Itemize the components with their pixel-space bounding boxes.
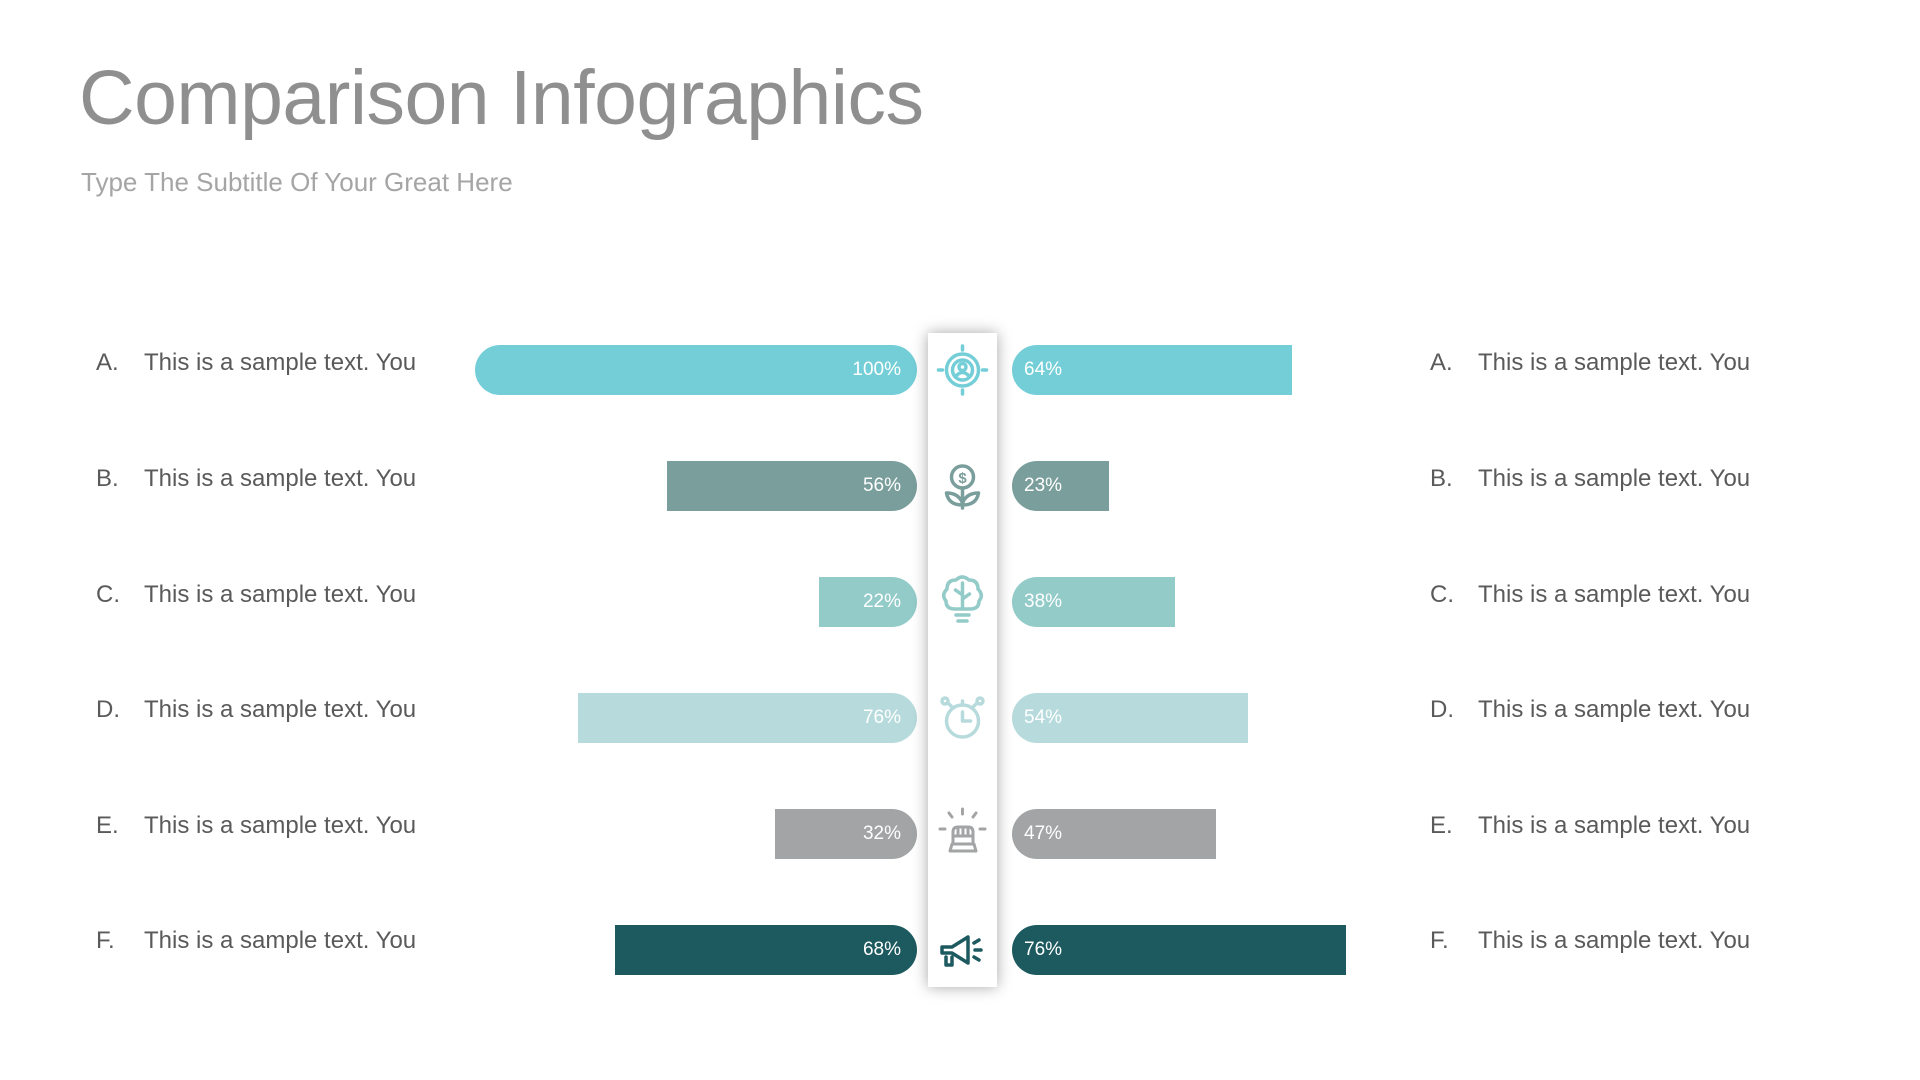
center icon column [928, 333, 997, 987]
right labels: This is a sample text. You [1478, 927, 1750, 954]
label B right: B. [1430, 465, 1453, 492]
icon: megaphone [942, 937, 981, 965]
bar E right 47% [1012, 809, 1216, 859]
bar C right 38%: 38% [1024, 591, 1062, 612]
subtitle: Type The Subtitle Of Your Great Here [81, 167, 513, 197]
label A left [96, 349, 416, 376]
label C left [96, 581, 416, 608]
bar E left 32% [775, 809, 917, 859]
bar D left 76%: 76% [863, 707, 901, 728]
label D left: D. [96, 696, 120, 723]
bar A right 64%: 64% [1024, 359, 1062, 380]
right labels: This is a sample text. You [1478, 812, 1750, 839]
label E left: E. [96, 812, 119, 839]
label D left [96, 696, 416, 723]
label F left [96, 927, 416, 954]
left labels: This is a sample text. You [144, 465, 416, 492]
right labels: This is a sample text. You [1478, 696, 1750, 723]
icon: target person [938, 346, 986, 394]
bar E left 32%: 32% [863, 823, 901, 844]
bar B right 23%: 23% [1024, 475, 1062, 496]
label C right: C. [1430, 581, 1454, 608]
label A right: A. [1430, 349, 1453, 376]
label E right [1430, 812, 1750, 839]
left labels: This is a sample text. You [144, 696, 416, 723]
bar D left 76% [578, 693, 917, 743]
left labels [96, 349, 416, 954]
icon: brain bulb [944, 577, 981, 621]
left labels: This is a sample text. You [144, 812, 416, 839]
label E right: E. [1430, 812, 1453, 839]
bar E right 47%: 47% [1024, 823, 1062, 844]
right labels: This is a sample text. You [1478, 465, 1750, 492]
bar B left 56%: 56% [863, 475, 901, 496]
bar B right 23% [1012, 461, 1109, 511]
bar A right 64% [1012, 345, 1292, 395]
bar C right 38% [1012, 577, 1175, 627]
icon: money plant [946, 466, 978, 508]
left bar chart [475, 345, 917, 975]
label D right: D. [1430, 696, 1454, 723]
right labels [1430, 349, 1750, 954]
icon: money plant: $ [958, 470, 967, 487]
bar F left 68%: 68% [863, 939, 901, 960]
label F right: F. [1430, 927, 1449, 954]
label B right [1430, 465, 1750, 492]
label A right [1430, 349, 1750, 376]
bar F right 76% [1012, 925, 1346, 975]
right labels: This is a sample text. You [1478, 349, 1750, 376]
bar D right 54%: 54% [1024, 707, 1062, 728]
bar D right 54% [1012, 693, 1248, 743]
bar C left 22%: 22% [863, 591, 901, 612]
left labels: This is a sample text. You [144, 349, 416, 376]
icon: fist [940, 809, 985, 851]
label F left: F. [96, 927, 115, 954]
icon: stopwatch [942, 698, 983, 737]
right labels: This is a sample text. You [1478, 581, 1750, 608]
label D right [1430, 696, 1750, 723]
label B left: B. [96, 465, 119, 492]
label C left: C. [96, 581, 120, 608]
bar A left 100%: 100% [852, 359, 901, 380]
label F right [1430, 927, 1750, 954]
label A left: A. [96, 349, 119, 376]
title: Comparison Infographics [79, 55, 924, 141]
bar B left 56% [667, 461, 917, 511]
bar F left 68% [615, 925, 917, 975]
right bar chart [1012, 345, 1346, 975]
label E left [96, 812, 416, 839]
label B left [96, 465, 416, 492]
bar F right 76%: 76% [1024, 939, 1062, 960]
bar A left 100% [475, 345, 917, 395]
label C right [1430, 581, 1750, 608]
left labels: This is a sample text. You [144, 581, 416, 608]
bar C left 22% [819, 577, 917, 627]
left labels: This is a sample text. You [144, 927, 416, 954]
